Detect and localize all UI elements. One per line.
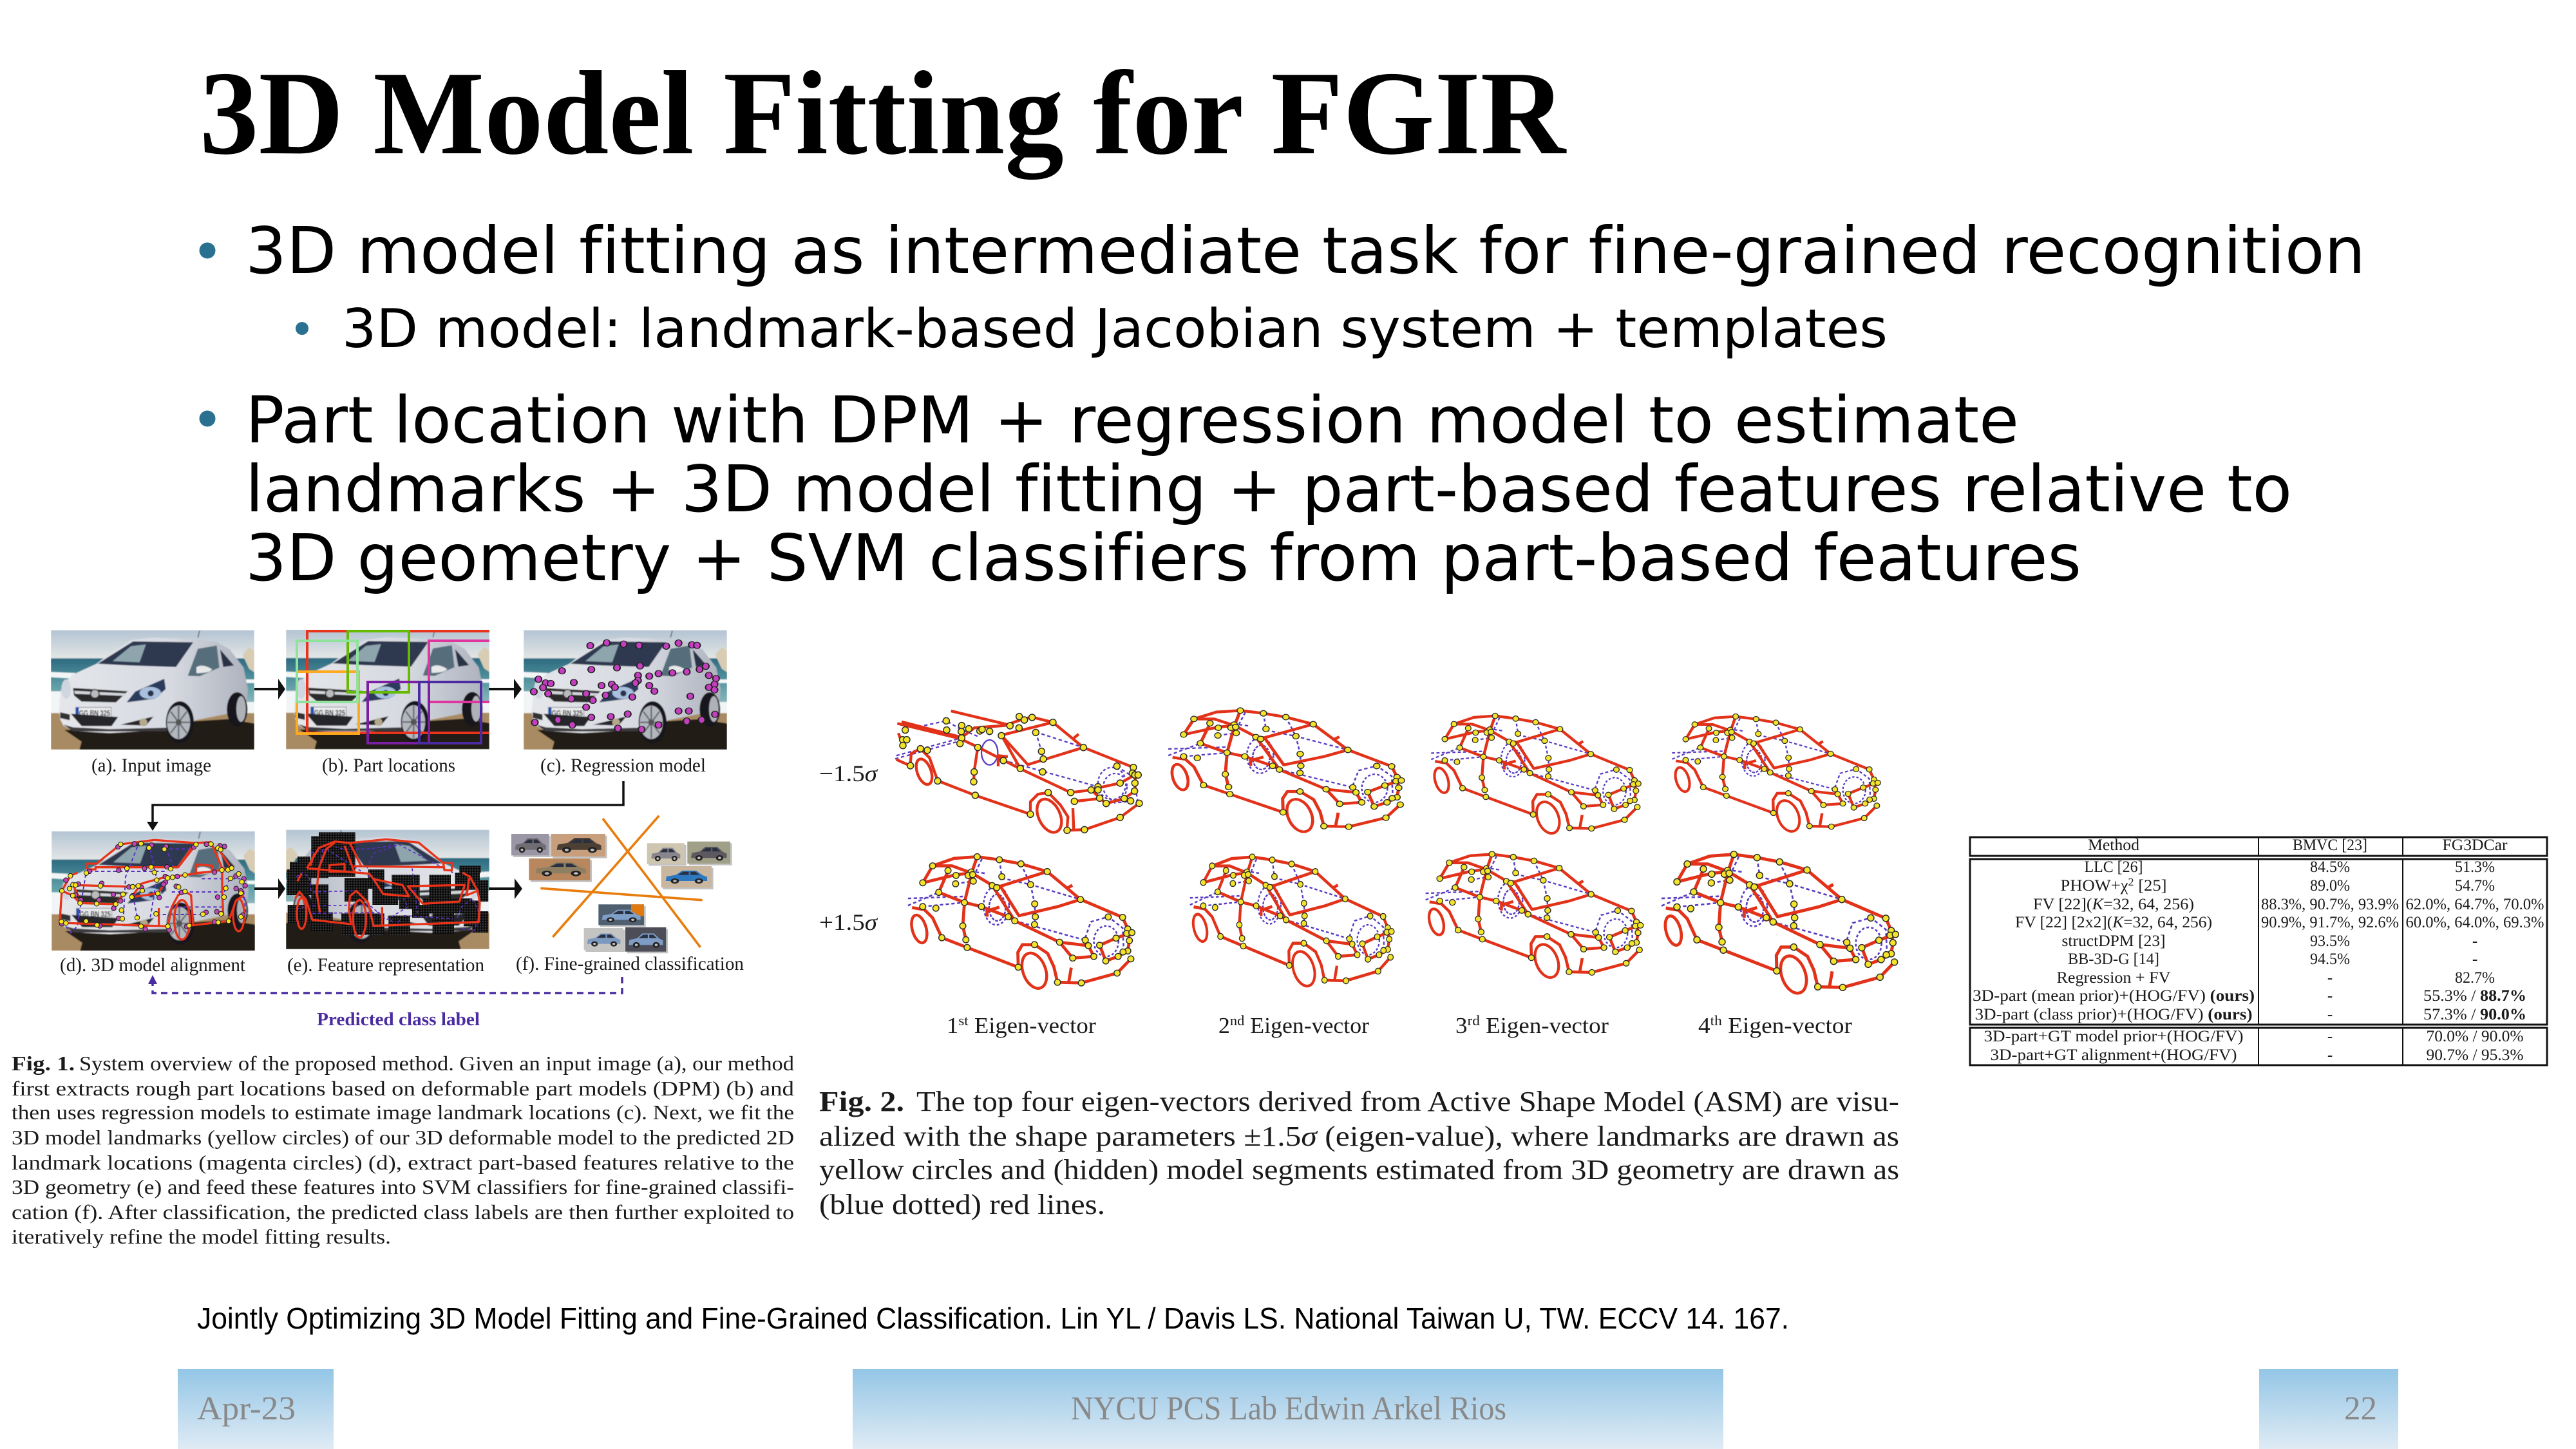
bullet 2: Part location with DPM + regression model to estimate [245, 383, 2019, 458]
table methods column: 3D-part+GT alignment+(HOG/FV) [1990, 1046, 2237, 1064]
table BMVC column: - [2327, 969, 2333, 987]
table methods column: FV [22](K=32, 64, 256) [2033, 896, 2194, 913]
eigen-vector labels: 1 [947, 1013, 958, 1038]
eigen-vector labels: 3 [1455, 1013, 1467, 1038]
figure 1 caption: 3D geometry (e) and feed these features into SVM classifiers for fine-grained classifi- [12, 1175, 794, 1198]
figure 1: system overview [51, 625, 744, 1030]
panel a: input image [51, 630, 254, 750]
table header: BMVC [23] [2293, 837, 2367, 854]
table methods column: Regression + FV [2057, 969, 2170, 987]
figure 1 caption: then uses regression models to estimate image landmark locations (c). Next, we fit the [12, 1101, 794, 1124]
eigen-vector labels: 4 [1698, 1013, 1709, 1038]
figure 1 caption: landmark locations (magenta circles) (d), extract part-based features relative to the [12, 1151, 794, 1174]
table header: FG3DCar [2442, 837, 2508, 854]
figure 1 caption [12, 1052, 794, 1248]
results table [1970, 837, 2547, 1065]
panel c: regression model [524, 630, 727, 750]
panel captions: (c). Regression model [540, 755, 706, 776]
table FG3DCar column [2406, 858, 2544, 1064]
eigen-vector labels: rd [1467, 1012, 1480, 1028]
table BMVC column: 89.0% [2310, 877, 2350, 895]
eigen-vector labels: th [1710, 1012, 1722, 1028]
table FG3DCar column: - [2472, 933, 2477, 950]
table methods column: 3D-part (class prior)+(HOG/FV) (ours) [1975, 1006, 2253, 1023]
figure 2 caption: alized with the shape parameters ±1.5 σ (eigen-value), where landmarks are drawn as [819, 1121, 1899, 1152]
figure 2 caption: (blue dotted) red lines. [819, 1189, 1105, 1220]
bullet 2: landmarks + 3D model fitting + part-based features relative to [245, 451, 2292, 527]
table header [2088, 837, 2508, 854]
wireframe: 2nd eigen-vector, +1.5 sigma [1190, 854, 1394, 989]
row label: minus: −1.5σ [819, 761, 878, 786]
wireframe: 1st eigen-vector, −1.5 sigma [895, 711, 1142, 836]
table FG3DCar column: 90.7% / 95.3% [2427, 1046, 2523, 1064]
table BMVC column [2261, 858, 2399, 1064]
table BMVC column: 88.3%, 90.7%, 93.9% [2261, 896, 2399, 913]
thumbnails: target car cluster [584, 904, 668, 953]
sub-bullet: 3D model: landmark-based Jacobian system + templates [342, 298, 1888, 360]
table methods column: PHOW+χ [2061, 877, 2124, 895]
footer: date: Apr-23 [197, 1390, 296, 1427]
thumbnails: hatchback cluster [647, 842, 732, 889]
table FG3DCar column: 55.3% / 88.7% [2423, 987, 2526, 1005]
panel f: fine-grained classification [511, 816, 732, 953]
panel b: part locations [286, 625, 497, 753]
table BMVC column: 90.9%, 91.7%, 92.6% [2261, 914, 2399, 931]
eigen-vector labels: st [958, 1012, 969, 1028]
arrow: class label feedback [148, 975, 622, 993]
wireframe: 3rd eigen-vector, −1.5 sigma [1431, 713, 1641, 837]
table methods column [1973, 858, 2255, 1064]
wireframe: 1st eigen-vector, +1.5 sigma [908, 854, 1135, 992]
eigen-vector labels [947, 1012, 1852, 1038]
panel captions [60, 755, 744, 976]
arrow: e to f [489, 878, 522, 899]
wireframe: 3rd eigen-vector, +1.5 sigma [1426, 851, 1643, 981]
panel captions: (a). Input image [91, 755, 211, 776]
bullet 1: 3D model fitting as intermediate task for fine-grained recognition [245, 213, 2365, 289]
figure 1 caption: iteratively refine the model fitting results. [12, 1225, 391, 1248]
thumbnails: truck cluster [511, 834, 607, 882]
panel captions: (d). 3D model alignment [60, 954, 246, 976]
eigen-vector labels: nd [1230, 1012, 1244, 1028]
table BMVC column: - [2327, 1006, 2333, 1023]
wireframe: 2nd eigen-vector, −1.5 sigma [1168, 708, 1405, 835]
figure 1 caption: Fig. 1. [12, 1052, 75, 1075]
table methods column: structDPM [23] [2062, 933, 2165, 950]
figure 1 caption: System overview of the proposed method. Given an input image (a), our method [79, 1052, 794, 1075]
table BMVC column: 84.5% [2310, 858, 2350, 876]
table FG3DCar column: 82.7% [2455, 969, 2495, 987]
figure 2 caption: yellow circles and (hidden) model segments estimated from 3D geometry are drawn as [819, 1154, 1899, 1186]
figure 2 caption [819, 1086, 1899, 1220]
eigen-vector labels: 2 [1218, 1013, 1230, 1038]
table grid [1970, 837, 2547, 1065]
bullet 2 [200, 383, 2292, 596]
footer: presenter: NYCU PCS Lab Edwin Arkel Rios [1071, 1390, 1506, 1427]
citation: Jointly Optimizing 3D Model Fitting and Fine-Grained Classification. Lin YL / Davis LS. National Taiwan U, TW. ECCV 14. 167. [197, 1302, 1789, 1335]
panel captions: (f). Fine-grained classification [516, 953, 744, 974]
table methods column: BB-3D-G [14] [2068, 951, 2159, 968]
table FG3DCar column: 51.3% [2455, 858, 2495, 876]
eigen-vector labels: Eigen-vector [1480, 1013, 1609, 1038]
panel d: 3D model alignment [52, 831, 255, 951]
panel captions: (e). Feature representation [287, 954, 484, 976]
footer: presenter [853, 1369, 1723, 1449]
table methods column: LLC [26] [2084, 858, 2143, 876]
table methods column: FV [22] [2x2](K=32, 64, 256) [2015, 914, 2212, 931]
row label: plus: +1.5σ [819, 909, 878, 935]
panel captions: (b). Part locations [322, 755, 455, 776]
figure 1 caption: cation (f). After classification, the predicted class labels are then further exploited to [12, 1200, 794, 1224]
figure 2 caption: The top four eigen-vectors derived from Active Shape Model (ASM) are visu- [916, 1086, 1899, 1117]
table FG3DCar column: 60.0%, 64.0%, 69.3% [2406, 914, 2544, 931]
figure 2 caption: Fig. 2. [819, 1086, 904, 1117]
table BMVC column: - [2327, 1046, 2333, 1064]
eigen-vector labels: Eigen-vector [969, 1013, 1096, 1038]
arrow: a to b [254, 679, 285, 699]
footer: slide number: 22 [2344, 1390, 2377, 1427]
table BMVC column: - [2327, 987, 2333, 1005]
wireframe: 4th eigen-vector, −1.5 sigma [1672, 714, 1880, 835]
table methods column: [25] [2134, 877, 2166, 895]
arrow: b to c [489, 679, 522, 699]
predicted class label: Predicted class label [317, 1010, 480, 1030]
title: 3D Model Fitting for FGIR [200, 47, 1567, 180]
footer: date [178, 1369, 334, 1449]
bullet list [200, 213, 2365, 596]
figure 1 caption: 3D model landmarks (yellow circles) of our 3D deformable model to the predicted 2D [12, 1126, 794, 1149]
table BMVC column: - [2327, 1028, 2333, 1045]
arrow: d to e [254, 878, 285, 899]
table FG3DCar column: - [2472, 951, 2477, 968]
bullet 2: 3D geometry + SVM classifiers from part-based features [245, 520, 2081, 596]
table FG3DCar column: 57.3% / 90.0% [2423, 1006, 2526, 1023]
arrow: c to d [147, 781, 623, 831]
table header: Method [2088, 837, 2140, 854]
table methods column: 2 [2128, 876, 2134, 888]
table methods column: 3D-part (mean prior)+(HOG/FV) (ours) [1973, 987, 2255, 1005]
eigen-vector labels: Eigen-vector [1244, 1013, 1369, 1038]
panel e: feature representation [286, 829, 489, 949]
figure 2: eigen-vector wireframes [819, 708, 1899, 1038]
table FG3DCar column: 70.0% / 90.0% [2427, 1028, 2523, 1045]
table FG3DCar column: 54.7% [2455, 877, 2495, 895]
table methods column: 3D-part+GT model prior+(HOG/FV) [1984, 1028, 2244, 1045]
eigen-vector labels: Eigen-vector [1722, 1013, 1852, 1038]
figure 1 caption: first extracts rough part locations based on deformable part models (DPM) (b) and [12, 1077, 794, 1100]
wireframe: 4th eigen-vector, +1.5 sigma [1662, 851, 1899, 997]
table FG3DCar column: 62.0%, 64.7%, 70.0% [2406, 896, 2544, 913]
table BMVC column: 94.5% [2310, 951, 2350, 968]
footer: slide number [2259, 1369, 2398, 1449]
table BMVC column: 93.5% [2310, 933, 2350, 950]
